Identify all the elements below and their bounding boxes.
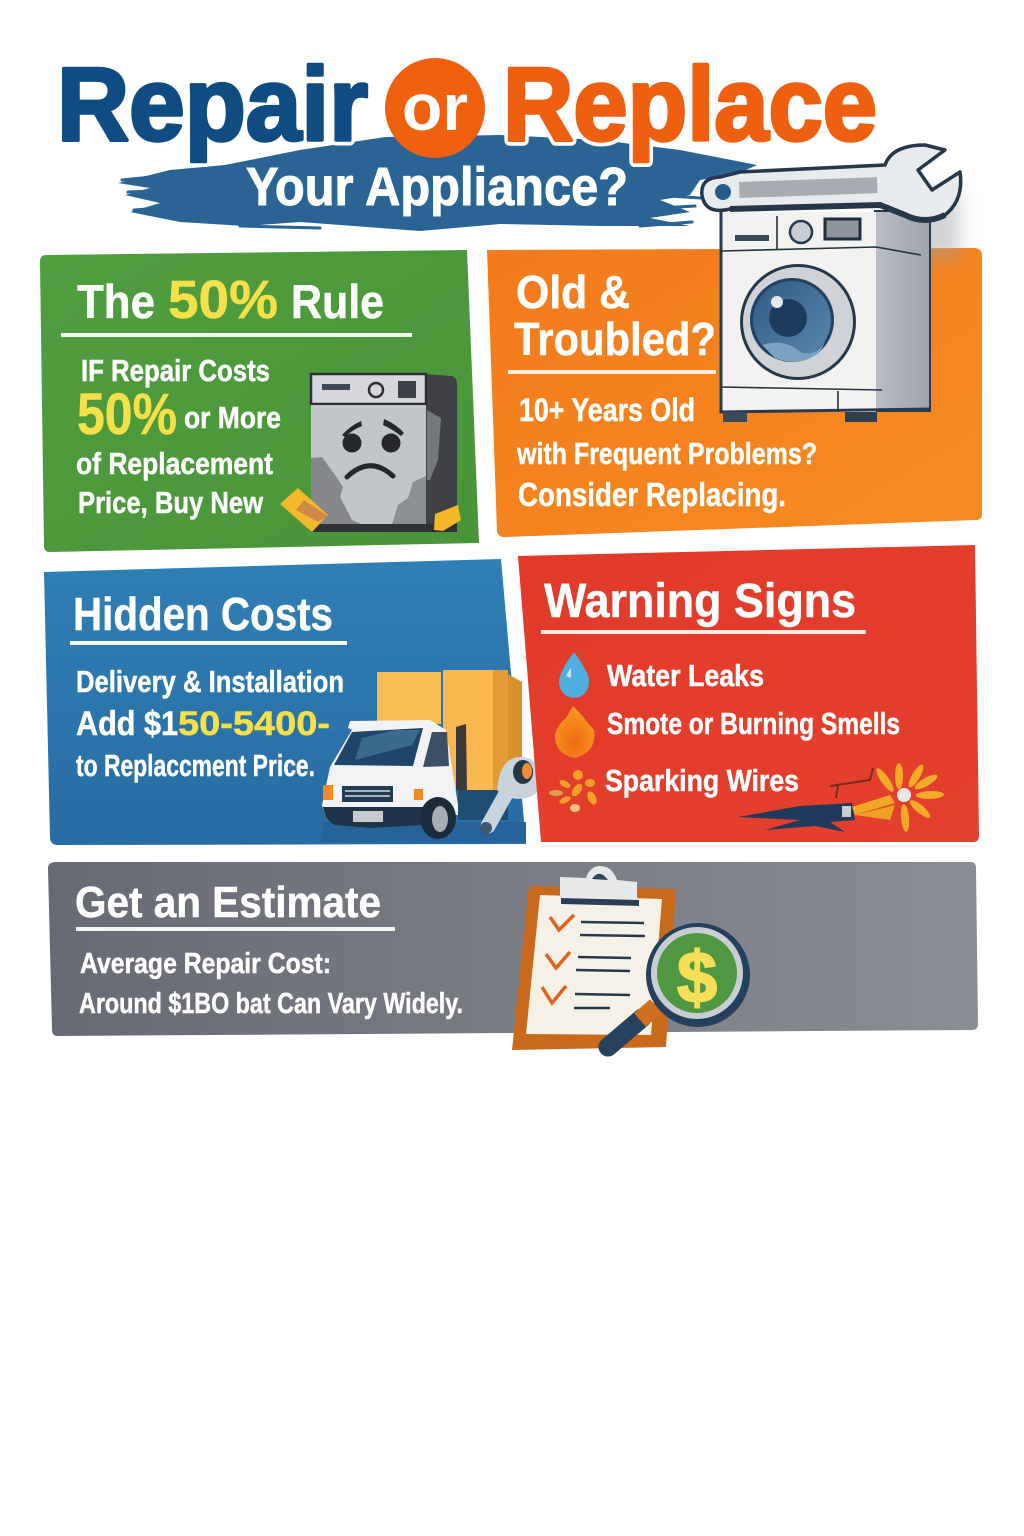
heading: Rule	[291, 275, 384, 328]
body text: to Replaccment Price.	[76, 748, 315, 783]
body text: Consider Replacing.	[518, 476, 786, 513]
rule text: Price, Buy New	[78, 485, 264, 520]
warning list: Smote or Burning Smells	[607, 706, 900, 741]
icon: sad broken appliance	[280, 374, 461, 532]
panel: the 50% rule	[40, 250, 479, 552]
icon: clipboard with magnifier: $	[677, 938, 717, 1018]
body text: Delivery & Installation	[76, 664, 344, 699]
body text: Average Repair Cost:	[80, 948, 331, 980]
panel background blue	[44, 559, 526, 845]
body text: with Frequent Problems?	[516, 436, 817, 471]
body text: Add $1	[76, 705, 178, 743]
warning list	[605, 658, 900, 798]
icon: sparks	[549, 770, 599, 812]
heading: Old &	[516, 266, 630, 318]
body text	[79, 948, 463, 1020]
rule text: 50%	[77, 382, 177, 447]
heading	[77, 270, 384, 330]
washer soft shadow	[890, 190, 960, 260]
rule text	[76, 353, 281, 520]
body text: 50-5400-	[178, 705, 330, 743]
icon: sparking wire	[738, 763, 944, 832]
body text: Around $1BO bat Can Vary Widely.	[79, 988, 463, 1020]
word: Replace: Replace	[503, 47, 877, 163]
panel background orange	[487, 248, 982, 537]
heading: 50%	[168, 270, 278, 330]
panel background green	[40, 250, 479, 552]
word: Repair: Repair	[57, 47, 368, 163]
rule text: or More	[184, 400, 281, 435]
icon: water drop	[559, 652, 589, 698]
rule text: IF Repair Costs	[81, 353, 270, 388]
body text	[516, 392, 817, 513]
panel background red	[518, 545, 979, 842]
heading: The	[77, 275, 155, 328]
icon: clipboard with magnifier	[512, 866, 750, 1050]
panel: get an estimate	[48, 862, 978, 1050]
icon: washing machine with wrench	[702, 145, 961, 422]
rule text: of Replacement	[76, 446, 273, 481]
heading: Troubled?	[514, 313, 716, 365]
word: Replace: Replace	[503, 47, 877, 163]
subtitle: Your Appliance?	[246, 157, 628, 217]
brush stroke	[118, 135, 757, 231]
word: Repair: Repair	[57, 47, 368, 163]
wrench	[702, 145, 961, 220]
panel: warning signs	[518, 545, 979, 842]
heading	[514, 266, 716, 365]
panel background gray	[48, 862, 978, 1036]
body text	[76, 664, 344, 783]
icon: delivery truck with wrench	[322, 670, 548, 842]
warning list: Water Leaks	[607, 658, 764, 693]
title	[57, 47, 877, 231]
heading: Get an Estimate	[75, 878, 381, 927]
panel: hidden costs	[44, 559, 548, 845]
panel: old and troubled	[487, 248, 982, 537]
heading: Warning Signs	[544, 575, 856, 628]
badge: or: or	[402, 70, 468, 144]
icon: flame	[555, 706, 594, 758]
warning list: Sparking Wires	[605, 763, 799, 798]
heading: Hidden Costs	[73, 588, 333, 640]
body text: 10+ Years Old	[519, 392, 695, 428]
badge: or	[385, 58, 485, 158]
